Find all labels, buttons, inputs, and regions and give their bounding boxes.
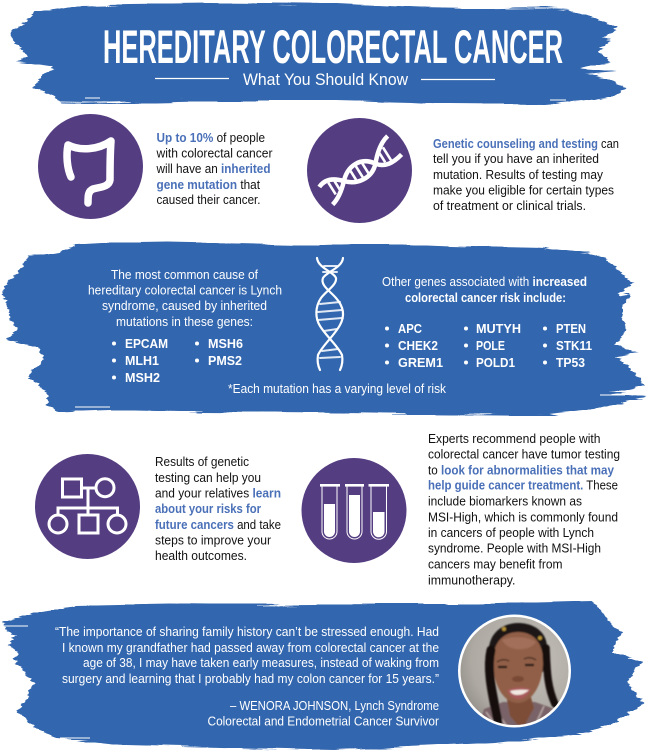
list: other genes: STK11 — [556, 339, 592, 353]
list: other genes: MUTYH — [476, 322, 521, 336]
text: other genes intro: Other genes associated with increased — [382, 275, 587, 289]
text: tumor testing: include biomarkers known as — [428, 495, 582, 509]
text: results of genetic testing: future cancers and take — [155, 518, 281, 532]
icon: colon — [38, 114, 143, 219]
list: other genes: POLD1 — [476, 356, 515, 370]
list: other genes: CHEK2 — [398, 339, 438, 353]
list: other genes: TP53 — [556, 356, 585, 370]
text: quote — [55, 625, 439, 686]
text: tumor testing: help guide cancer treatment. These — [428, 479, 618, 493]
list: other genes: GREM1 — [398, 356, 443, 370]
icon: dna sketch — [316, 258, 343, 370]
text: results of genetic testing: and your relatives learn — [155, 486, 281, 500]
text: tumor testing: MSI-High, which is commonly found — [428, 511, 618, 525]
text: tumor testing: immunotherapy. — [428, 573, 516, 587]
text: other genes intro: colorectal cancer risk include: — [405, 291, 566, 305]
icon: family tree — [35, 454, 140, 559]
icon: test tubes — [302, 458, 406, 563]
text: up to 10%: Up to 10% of people — [156, 131, 265, 145]
text: genetic counseling: tell you if you have an inherited — [433, 152, 599, 166]
text: quote: I known my grandfather had passed away from colorectal cancer at the — [62, 641, 439, 655]
text: up to 10%: will have an inherited — [156, 162, 270, 176]
text: tumor testing: in cancers of people with Lynch — [428, 526, 594, 540]
footnote: *Each mutation has a varying level of risk — [228, 382, 447, 396]
list: lynch genes: PMS2 — [208, 354, 242, 368]
text: attribution: – WENORA JOHNSON, Lynch Syndrome — [230, 699, 439, 713]
text: up to 10%: with colorectal cancer — [156, 146, 272, 160]
list: other genes — [385, 322, 592, 370]
icon: dna double helix — [307, 118, 412, 223]
text: genetic counseling — [433, 137, 619, 213]
list: other genes: APC — [398, 322, 422, 336]
text: genetic counseling: of treatment or clinical trials. — [433, 199, 586, 213]
text: lynch syndrome intro — [88, 268, 282, 329]
panel: title banner — [10, 3, 627, 105]
text: genetic counseling: make you eligible for certain types — [433, 184, 614, 198]
text: quote: age of 38, I may have taken early measures, instead of waking from — [83, 656, 439, 670]
text: tumor testing — [428, 432, 620, 587]
text: lynch syndrome intro: syndrome, caused by inherited — [102, 299, 267, 313]
text: tumor testing: Experts recommend people with — [428, 432, 600, 446]
list: other genes: POLE — [476, 339, 505, 353]
text: results of genetic testing: Results of genetic — [155, 455, 249, 469]
text: tumor testing: cancers may benefit from — [428, 558, 562, 572]
text: lynch syndrome intro: The most common cause of — [111, 268, 258, 282]
text: results of genetic testing: steps to improve your — [155, 534, 271, 548]
text: tumor testing: to look for abnormalities that may — [428, 463, 614, 477]
list: lynch genes: MSH6 — [208, 337, 243, 351]
text: results of genetic testing: health outcomes. — [155, 549, 247, 563]
text: tumor testing: colorectal cancer have tumor testing — [428, 448, 620, 462]
text: other genes intro — [382, 275, 587, 305]
text: quote: “The importance of sharing family history can’t be stressed enough. Had — [55, 625, 439, 639]
text: attribution: Colorectal and Endometrial Cancer Survivor — [208, 714, 439, 728]
text: results of genetic testing: testing can help you — [155, 471, 261, 485]
text: genetic counseling: mutation. Results of testing may — [433, 168, 604, 182]
text: up to 10%: caused their cancer. — [156, 193, 260, 207]
list: lynch genes: EPCAM — [125, 337, 168, 351]
text: up to 10% — [156, 131, 272, 207]
panel: survivor quote — [0, 601, 645, 750]
list: lynch genes: MSH2 — [125, 371, 160, 385]
list: lynch genes — [112, 337, 243, 385]
text: results of genetic testing: about your risks for — [155, 502, 261, 516]
list: other genes: PTEN — [556, 322, 586, 336]
text: up to 10%: gene mutation that — [156, 178, 260, 192]
text: lynch syndrome intro: mutations in these genes: — [116, 315, 253, 329]
panel: genes — [2, 242, 645, 415]
text: lynch syndrome intro: hereditary colorectal cancer is Lynch — [88, 284, 282, 298]
text: quote: surgery and learning that I probably had my colon cancer for 15 years.” — [62, 672, 439, 686]
text: attribution — [208, 699, 439, 728]
text: results of genetic testing — [155, 455, 281, 563]
text: genetic counseling: Genetic counseling and testing can — [433, 137, 619, 151]
subtitle: What You Should Know — [243, 70, 409, 89]
portrait: wenora johnson — [458, 614, 571, 728]
text: tumor testing: syndrome. People with MSI-High — [428, 542, 601, 556]
list: lynch genes: MLH1 — [125, 354, 159, 368]
